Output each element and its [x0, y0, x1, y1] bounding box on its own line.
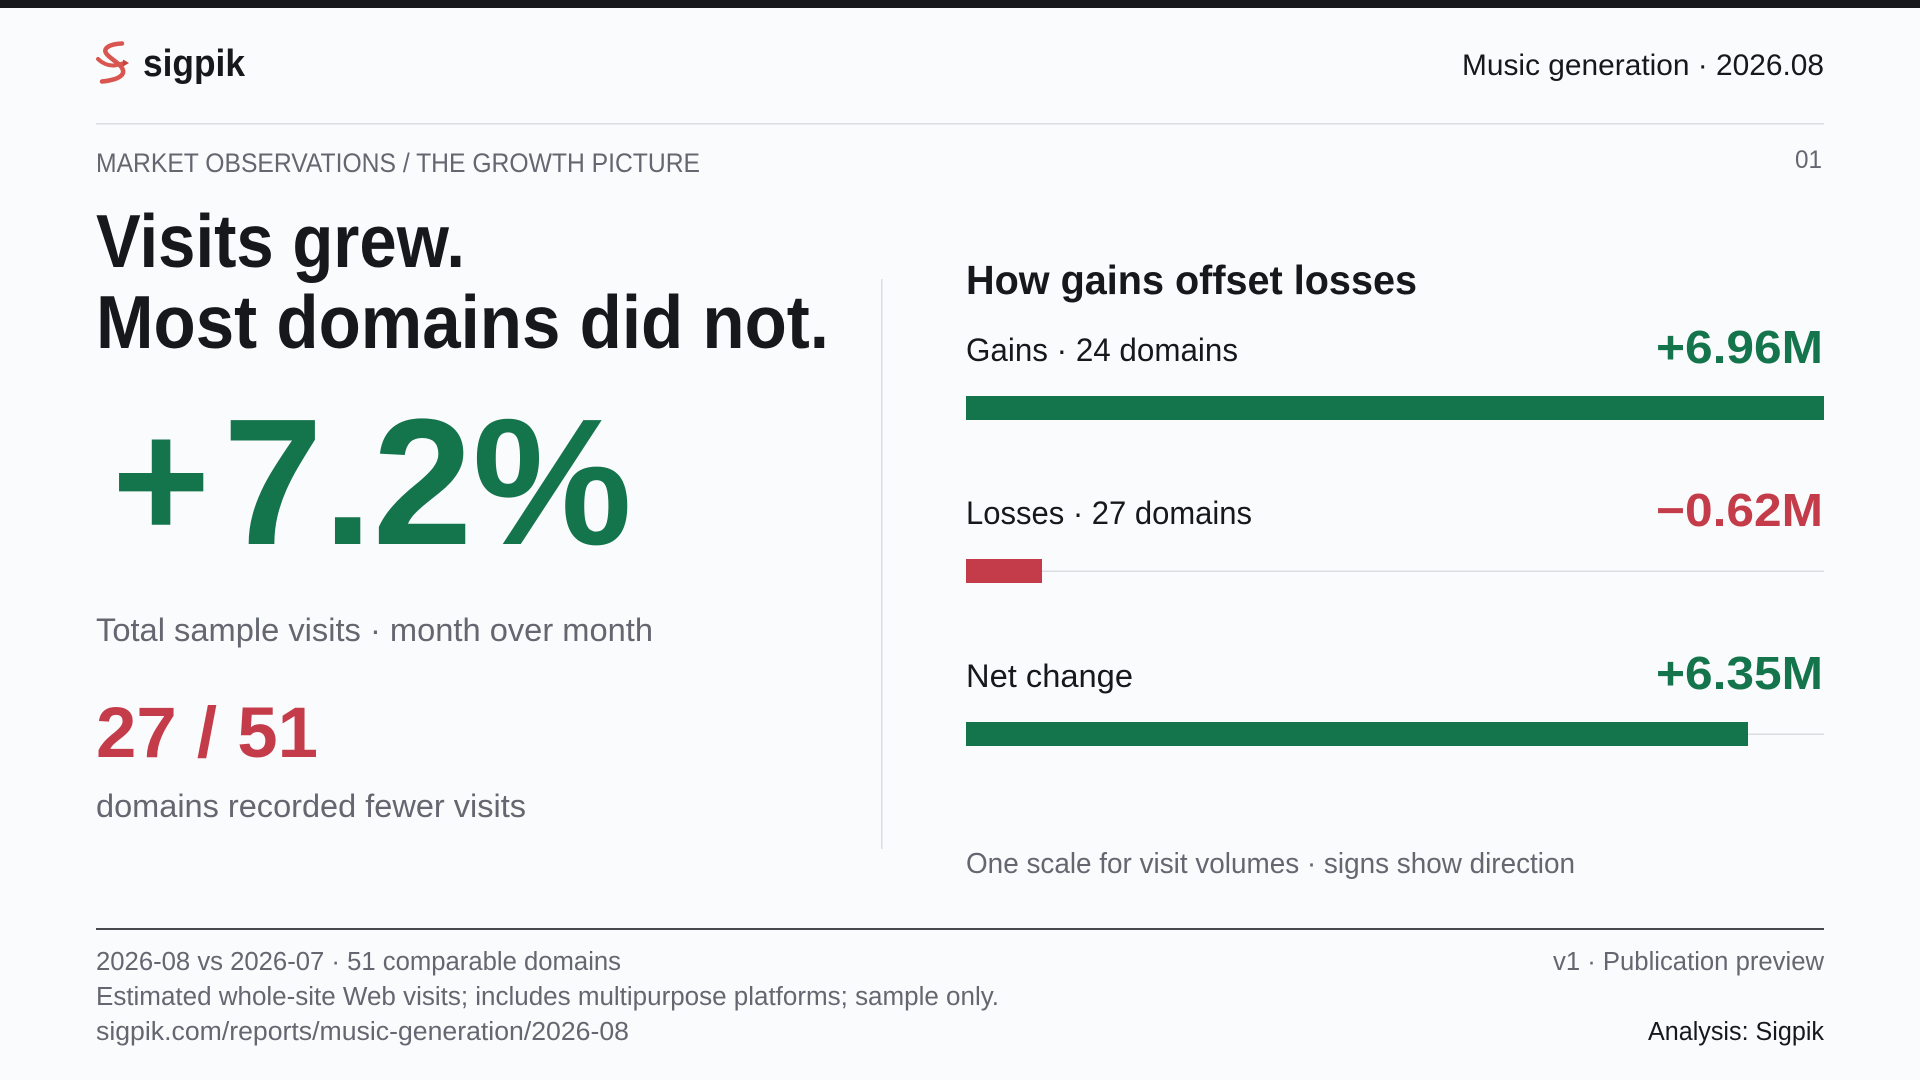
footer: version and credit — [1553, 948, 1825, 1046]
bar row: losses — [966, 484, 1824, 583]
title: Visits grew. — [96, 199, 465, 283]
big number: total growth: 7.2% — [223, 382, 632, 583]
brand name: sigpik — [143, 43, 246, 85]
secondary number caption: domains recorded fewer visits — [96, 788, 526, 824]
kicker: MARKET OBSERVATIONS / THE GROWTH PICTURE — [96, 148, 700, 178]
big number: total growth: + — [112, 386, 210, 574]
footer: sources — [96, 948, 999, 1046]
bar row: gains: +6.96M — [1656, 321, 1823, 373]
icon: sigpik logo — [98, 44, 129, 82]
bar row: gains — [966, 321, 1824, 420]
panel heading: How gains offset losses — [966, 257, 1417, 303]
bar row: losses: Losses · 27 domains — [966, 495, 1252, 531]
report tag: Music generation · 2026.08 — [1462, 49, 1824, 82]
footer: sources: 2026-08 vs 2026-07 · 51 comparable domains — [96, 948, 621, 976]
page number: 01 — [1795, 146, 1822, 174]
footer: sources: sigpik.com/reports/music-generation/2026-08 — [96, 1018, 629, 1046]
bar row: net change: +6.35M — [1656, 647, 1823, 699]
footer: version and credit: Analysis: Sigpik — [1648, 1018, 1824, 1046]
title: Most domains did not. — [96, 280, 829, 364]
bar row: gains: Gains · 24 domains — [966, 332, 1238, 368]
scale note: One scale for visit volumes · signs show direction — [966, 848, 1575, 880]
panel: headline stats — [96, 199, 829, 824]
bar row: net change: Net change — [966, 658, 1133, 694]
bar row: net change — [966, 647, 1824, 746]
bar row: losses: −0.62M — [1656, 484, 1823, 536]
panel: how gains offset losses — [966, 257, 1824, 880]
footer: sources: Estimated whole-site Web visits; includes multipurpose platforms; sample only. — [96, 983, 999, 1011]
secondary number: declining domains: 27 / 51 — [96, 694, 318, 773]
title — [96, 199, 829, 364]
big number caption: Total sample visits · month over month — [96, 612, 653, 648]
footer: version and credit: v1 · Publication preview — [1553, 948, 1825, 976]
header — [98, 43, 1824, 85]
